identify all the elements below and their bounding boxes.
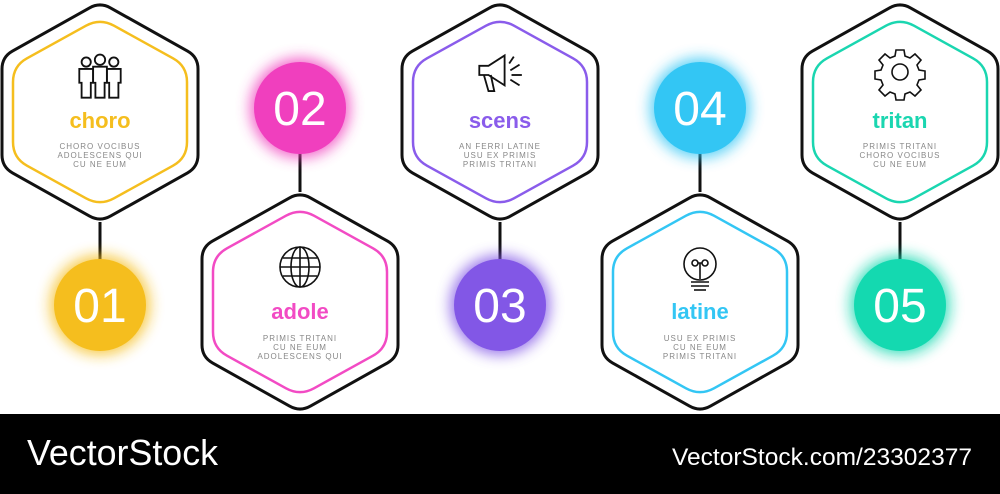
icon: gear [875, 50, 925, 100]
circle: 01: 01 [73, 280, 127, 333]
panel: step 3 scens [402, 5, 598, 219]
circle: 01 [50, 255, 150, 355]
title: adole [271, 299, 329, 324]
panel: step 1 choro [2, 5, 198, 219]
circle: 05 [850, 255, 950, 355]
description: ADOLESCENS QUI [257, 352, 343, 361]
panel: step 2 adole [202, 195, 398, 409]
panel: step 5 tritan [802, 5, 998, 219]
description: CU NE EUM [273, 343, 327, 352]
circle: 03: 03 [473, 280, 527, 333]
circle: 04 [650, 58, 750, 158]
description: CU NE EUM [73, 160, 127, 169]
description [859, 142, 941, 169]
description: CHORO VOCIBUS [859, 151, 941, 160]
description: USU EX PRIMIS [464, 151, 536, 160]
footer logo text: VectorStock [27, 432, 219, 473]
description [663, 334, 737, 361]
title: scens [469, 108, 531, 133]
description: PRIMIS TRITANI [463, 160, 537, 169]
icon: megaphone [479, 55, 522, 91]
circle: 02 [250, 58, 350, 158]
description: PRIMIS TRITANI [863, 142, 937, 151]
description [459, 142, 541, 169]
description: CU NE EUM [873, 160, 927, 169]
circle: 03 [450, 255, 550, 355]
title: latine [671, 299, 729, 324]
icon: globe [280, 247, 320, 287]
title: choro [69, 108, 131, 133]
footer url text: VectorStock.com/23302377 [672, 444, 972, 471]
description: ADOLESCENS QUI [57, 151, 143, 160]
description [257, 334, 343, 361]
footer bar [0, 414, 1000, 494]
panel: step 4 latine [602, 195, 798, 409]
circle: 02: 02 [273, 83, 327, 136]
description: USU EX PRIMIS [664, 334, 736, 343]
description: CU NE EUM [673, 343, 727, 352]
icon: bulb [684, 248, 716, 290]
title: tritan [872, 108, 928, 133]
circle: 05: 05 [873, 280, 927, 333]
description: PRIMIS TRITANI [663, 352, 737, 361]
icon: people [79, 55, 121, 98]
description [57, 142, 143, 169]
description: AN FERRI LATINE [459, 142, 541, 151]
description: CHORO VOCIBUS [59, 142, 141, 151]
connector lines [100, 150, 900, 260]
description: PRIMIS TRITANI [263, 334, 337, 343]
circle: 04: 04 [673, 83, 727, 136]
